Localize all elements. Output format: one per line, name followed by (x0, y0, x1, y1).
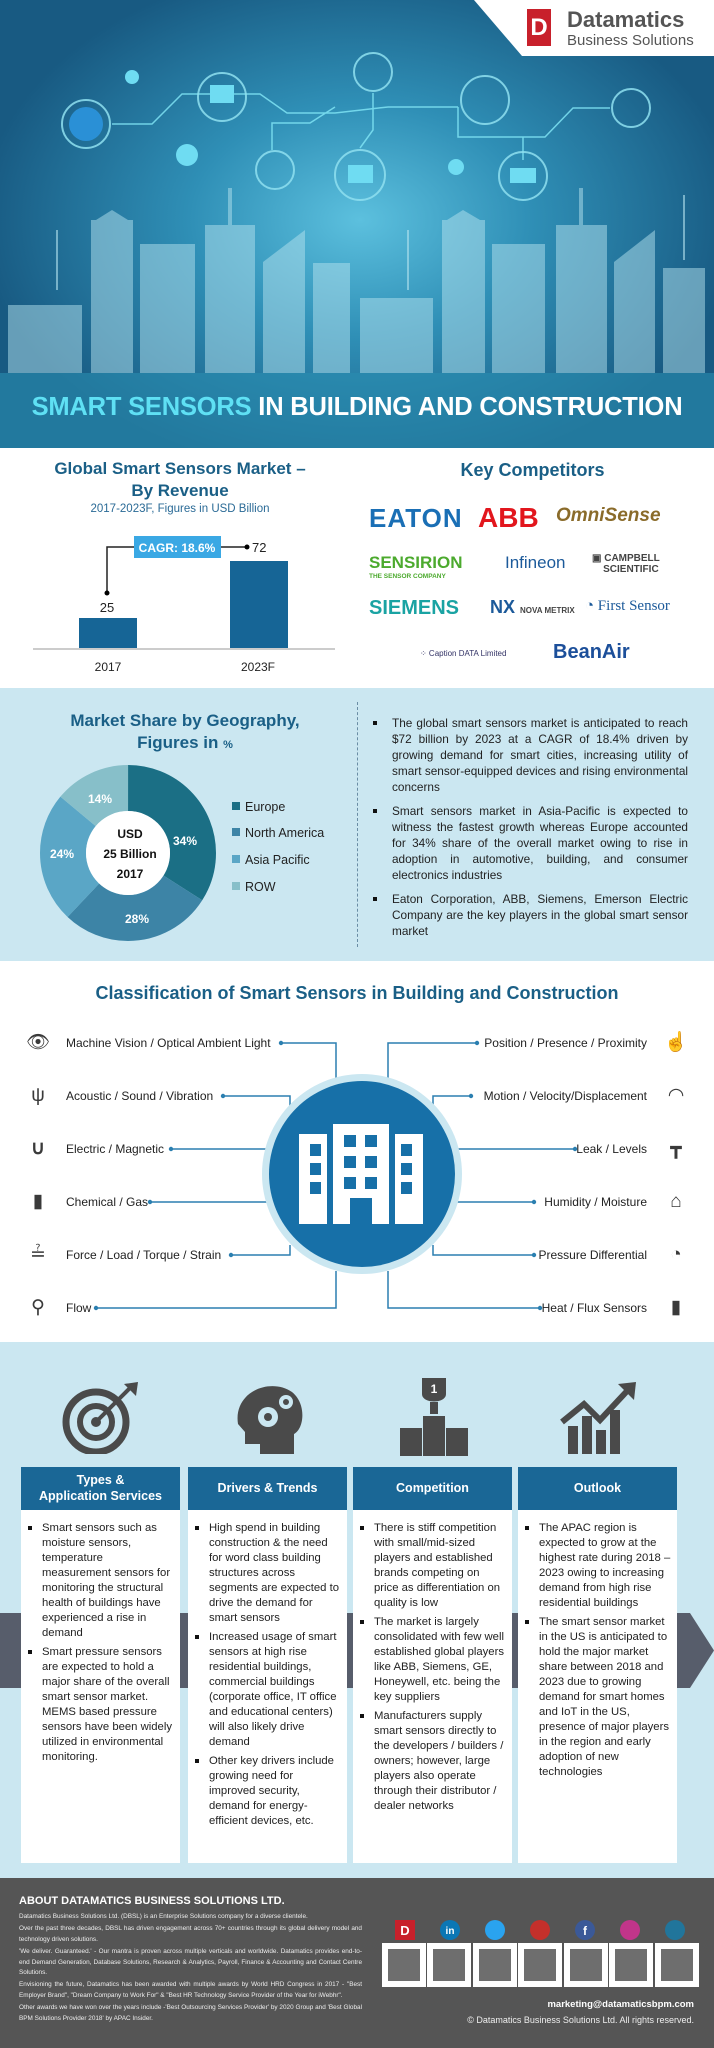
left sensor list: 👁 (26, 1032, 50, 1053)
column: types: Types & (77, 1473, 124, 1487)
heading: geography: Figures in % (137, 733, 233, 752)
about text (19, 1913, 362, 2022)
right sensor list: ☝ (664, 1032, 688, 1053)
hero banner (0, 0, 714, 448)
column: competition: Manufacturers supply smart sensors directly to the developers / builders / owners; however, large players also operate through their distributor / dealer networks (374, 1710, 503, 1812)
column: drivers: High spend in building construction & the need for word class building structures across segments are expected to drive the demand for smart sensors (209, 1522, 339, 1624)
panel: revenue bar chart (33, 459, 335, 674)
right sensor list: Heat / Flux Sensors (542, 1301, 647, 1315)
column: drivers (188, 1467, 347, 1863)
panel: revenue bar chart: By Revenue (131, 481, 229, 500)
right sensor list: ⌂ (670, 1191, 682, 1212)
panel: key competitors: SCIENTIFIC (603, 564, 659, 575)
column: drivers: Increased usage of smart sensors at high rise residential buildings, commercial buildings (corporate office, IT office and educational centers) will also likely drive demand (209, 1631, 336, 1748)
donut chart: 28% (125, 912, 149, 926)
column: competition: Competition (396, 1481, 469, 1495)
right sensor list: ◠ (668, 1085, 684, 1106)
left sensor list: Chemical / Gas (66, 1195, 148, 1209)
right sensor list: ▮ (671, 1297, 681, 1318)
panel: revenue bar chart: CAGR: 18.6% (139, 541, 216, 555)
social icons and QR codes: in (446, 1926, 454, 1937)
column: outlook: Outlook (574, 1481, 621, 1495)
column: drivers: Other key drivers include growing need for improved security, demand for energy-efficient devices, etc. (209, 1755, 334, 1827)
donut chart (40, 765, 324, 941)
column: outlook: The APAC region is expected to grow at the highest rate during 2018 – 2023 owing to increasing demand from high rise residential buildings (539, 1522, 670, 1609)
left sensor list: Electric / Magnetic (66, 1142, 164, 1156)
social icons and QR codes: D (400, 1923, 410, 1938)
column: outlook: The smart sensor market in the US is anticipated to hold the major market share between 2018 and 2023 due to growing demand for smart homes and IoT in the US, presence of major players in the region and early adoption of new technologies (539, 1616, 669, 1778)
panel: revenue bar chart: 72 (252, 540, 266, 555)
left sensor list: ▮ (33, 1191, 43, 1212)
left sensor list: ≟ (30, 1244, 46, 1265)
panel: key competitors (369, 460, 670, 663)
logo: Datamatics (567, 7, 684, 32)
panel: geography (0, 688, 714, 961)
about text: 'We deliver. Guaranteed.' - Our mantra is proven across multiple verticals and worldwide. Datamatics provides end-to-end Demand Generation, Database Solutions, Research & Analytics, Payroll, Finance & Accounting and Contact Centre Solutions. (19, 1948, 362, 1976)
bullets: geography: Eaton Corporation, ABB, Siemens, Emerson Electric Company are the key players in the global smart sensor market (392, 892, 688, 938)
column: competition: The market is largely consolidated with few well established global players like ABB, Siemens, GE, Honeywell, etc. being the key suppliers (374, 1616, 504, 1703)
donut chart: ROW (245, 880, 276, 894)
panel: key competitors: ◔ First Sensor (585, 598, 670, 614)
donut chart: 2017 (117, 867, 144, 881)
bullets: geography: The global smart sensors market is anticipated to reach $72 billion by 2023 at a CAGR of 18.4% driven by growing demand for smart cities, increasing utility of smart sensor-equipped devices and rising environmental concerns (392, 716, 688, 794)
column: outlook (518, 1467, 677, 1863)
panel: key competitors: ABB (478, 502, 539, 533)
contact: marketing@datamaticsbpm.com (547, 1999, 694, 2010)
about text: Datamatics Business Solutions Ltd. (DBSL) is an Enterprise Solutions company for a diverse clientele. (19, 1913, 308, 1920)
about text: Over the past three decades, DBSL has driven engagement across 70+ countries through its global delivery model and technology driven solutions. (19, 1925, 362, 1943)
heading: about: ABOUT DATAMATICS BUSINESS SOLUTIONS LTD. (19, 1895, 285, 1907)
title: SMART SENSORS IN BUILDING AND CONSTRUCTION (32, 393, 682, 421)
panel: key competitors: NX NOVA METRIX (490, 597, 575, 617)
footer (0, 1878, 714, 2048)
panel: key competitors: ▣ CAMPBELL (592, 553, 660, 564)
right sensor list: Pressure Differential (538, 1248, 647, 1262)
panel: revenue bar chart: 25 (100, 600, 114, 615)
left sensor list (26, 1032, 271, 1318)
about text: Other awards we have won over the years include -'Best Outsourcing Services Provider' by 2020 Group and 'Best Global BPM Solutions Provider 2018' by APAC Insider. (19, 2004, 362, 2022)
left sensor list: ⚲ (31, 1297, 45, 1318)
panel: key competitors: SENSIRION (369, 553, 463, 572)
left sensor list: Machine Vision / Optical Ambient Light (66, 1036, 271, 1050)
panel: revenue bar chart: 2017 (95, 660, 122, 674)
donut chart: North America (245, 826, 324, 840)
panel: key competitors: ⁘ Caption DATA Limited (420, 649, 506, 658)
panel: key competitors: THE SENSOR COMPANY (369, 573, 446, 580)
panel: revenue bar chart: 2017-2023F, Figures in USD Billion (90, 503, 269, 515)
heading: geography: Market Share by Geography, (70, 711, 300, 730)
right sensor list: Position / Presence / Proximity (484, 1036, 647, 1050)
panel: key competitors: BeanAir (553, 641, 630, 663)
panel: key competitors: Infineon (505, 553, 566, 572)
column: types: Smart sensors such as moisture sensors, temperature measurement sensors for monitoring the structural health of buildings have experienced a rise in demand (42, 1522, 170, 1639)
donut chart: USD (117, 827, 143, 841)
logo (474, 0, 714, 56)
icon: trophy podium: 1 (431, 1382, 438, 1396)
column: drivers: Drivers & Trends (217, 1481, 318, 1495)
donut chart: 34% (173, 834, 197, 848)
column: types (21, 1467, 180, 1863)
icon: trophy podium (400, 1378, 468, 1456)
footer: © Datamatics Business Solutions Ltd. All rights reserved. (467, 2015, 694, 2025)
panel: revenue bar chart: 2023F (241, 660, 275, 674)
right sensor list: Motion / Velocity/Displacement (484, 1089, 647, 1103)
column: types: Smart pressure sensors are expected to hold a major share of the overall smart sensor market. MEMS based pressure sensors have been widely utilized in environmental monitoring. (42, 1646, 172, 1763)
panel: key competitors: Key Competitors (460, 460, 605, 480)
panel: insights (0, 1342, 714, 1878)
left sensor list: Force / Load / Torque / Strain (66, 1248, 221, 1262)
panel: classification (26, 983, 688, 1318)
about text: Envisioning the future, Datamatics has been awarded with multiple awards by World HRD Congress in 2017 - "Best Employer Brand", "Dream Company to Work For" & "Best HR Technology Service Provider of the Year for iWebhr". (19, 1981, 362, 1999)
left sensor list: ∪ (31, 1138, 45, 1159)
right sensor list: ◔ (670, 1244, 682, 1265)
icon: target (62, 1382, 138, 1454)
panel: revenue bar chart: Global Smart Sensors Market – (54, 459, 306, 478)
heading: geography (70, 711, 300, 752)
bullets: geography: Smart sensors market in Asia-Pacific is expected to witness the fastest growth whereas Europe accounted for 34% share of the overall market owing to rise in adoption in automotive, building, and consumer electronics industries (392, 804, 688, 882)
column: competition: There is stiff competition with small/mid-sized players and established brands competing on price as differentiation on quality is low (374, 1522, 500, 1609)
panel: key competitors: EATON (369, 503, 463, 533)
donut chart: 24% (50, 847, 74, 861)
column: types: Application Services (39, 1488, 162, 1502)
left sensor list: Flow (66, 1301, 91, 1315)
panel: key competitors: OmniSense (556, 505, 661, 526)
bullets: geography (373, 716, 688, 938)
right sensor list: Leak / Levels (576, 1142, 647, 1156)
arrow band (0, 1613, 690, 1688)
social icons and QR codes: f (583, 1924, 588, 1938)
logo: D (530, 14, 548, 41)
left sensor list: Acoustic / Sound / Vibration (66, 1089, 213, 1103)
donut chart: Europe (245, 800, 285, 814)
panel: key competitors: SIEMENS (369, 597, 459, 619)
right sensor list (484, 1031, 688, 1318)
icon: building circle (262, 1074, 462, 1274)
donut chart: 25 Billion (103, 847, 157, 861)
icon: growth chart (560, 1382, 636, 1454)
social icons and QR codes (382, 1920, 699, 1987)
column: competition (353, 1467, 512, 1863)
donut chart: 14% (88, 792, 112, 806)
right sensor list: ┳ (670, 1138, 682, 1159)
right sensor list: Humidity / Moisture (544, 1195, 647, 1209)
donut chart: Asia Pacific (245, 853, 310, 867)
icon: head gears (238, 1386, 302, 1454)
logo: Business Solutions (567, 32, 694, 49)
city skyline (0, 52, 714, 448)
left sensor list: ψ (31, 1085, 45, 1106)
panel: classification: Classification of Smart Sensors in Building and Construction (95, 983, 619, 1003)
